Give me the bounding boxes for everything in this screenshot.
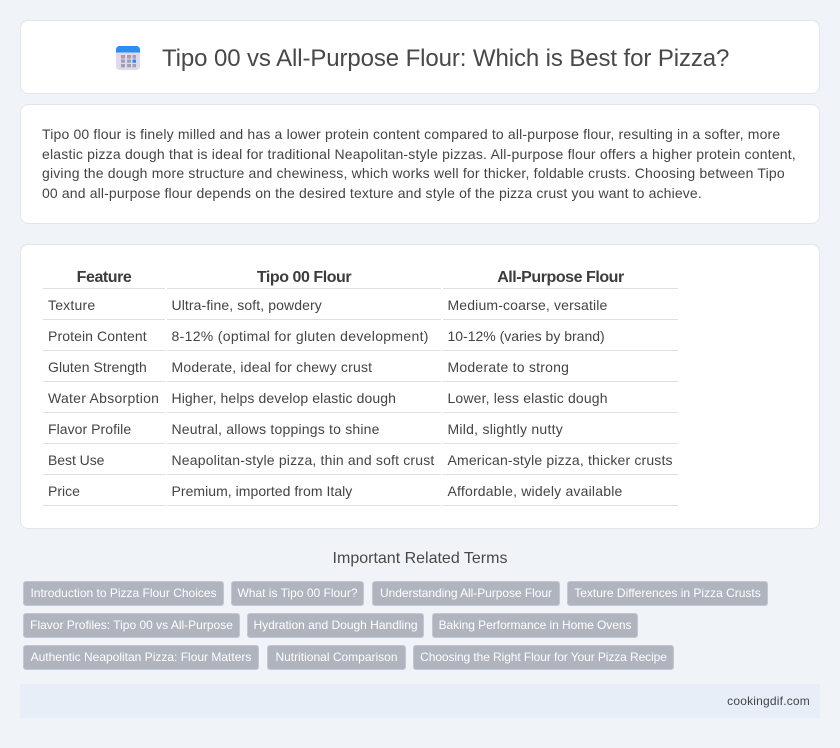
intro paragraph: giving the dough more structure and chewiness, which works well for thicker, foldable crusts. Choosing between Tipo — [42, 165, 785, 181]
table header — [77, 269, 624, 286]
table rows: Flavor Profile — [48, 421, 131, 437]
related term tags: Hydration and Dough Handling — [253, 618, 418, 632]
table rows: Protein Content — [48, 328, 147, 344]
table rows: Affordable, widely available — [448, 483, 623, 499]
related term tags: What is Tipo 00 Flour? — [237, 586, 358, 600]
table rows: Water Absorption — [48, 390, 159, 406]
table rows — [43, 288, 678, 506]
header panel — [20, 20, 820, 94]
footer source: cookingdif.com — [727, 694, 810, 708]
intro paragraph — [42, 126, 796, 201]
table rows: Lower, less elastic dough — [448, 390, 608, 406]
table rows: Neutral, allows toppings to shine — [172, 421, 380, 437]
table rows: Texture — [48, 297, 95, 313]
table header: Tipo 00 Flour — [257, 269, 351, 286]
table rows: Premium, imported from Italy — [172, 483, 352, 499]
icon: calendar — [116, 46, 140, 70]
table rows: Moderate, ideal for chewy crust — [172, 359, 372, 375]
table rows: Mild, slightly nutty — [448, 421, 563, 437]
related term tags — [23, 581, 768, 670]
related term tags: Flavor Profiles: Tipo 00 vs All-Purpose — [30, 618, 233, 632]
table rows: Moderate to strong — [448, 359, 569, 375]
table rows: 8-12% (optimal for gluten development) — [172, 328, 429, 344]
related term tags: Texture Differences in Pizza Crusts — [574, 586, 761, 600]
related term tags: Understanding All-Purpose Flour — [380, 586, 552, 600]
table rows: 10-12% (varies by brand) — [448, 328, 605, 344]
title: Tipo 00 vs All-Purpose Flour: Which is Best for Pizza? — [162, 45, 729, 72]
related term tags: Choosing the Right Flour for Your Pizza Recipe — [420, 650, 667, 664]
related term tags: Nutritional Comparison — [275, 650, 398, 664]
table rows: Gluten Strength — [48, 359, 147, 375]
intro paragraph: elastic pizza dough that is ideal for traditional Neapolitan-style pizzas. All-purpose flour offers a higher protein content, — [42, 146, 796, 162]
intro paragraph: Tipo 00 flour is finely milled and has a lower protein content compared to all-purpose flour, resulting in a softer, more — [42, 126, 780, 142]
intro paragraph: 00 and all-purpose flour depends on the desired texture and style of the pizza crust you want to achieve. — [42, 184, 702, 200]
table rows: American-style pizza, thicker crusts — [448, 452, 673, 468]
table header: All-Purpose Flour — [497, 269, 624, 286]
table rows: Price — [48, 483, 80, 499]
table rows: Higher, helps develop elastic dough — [172, 390, 396, 406]
related terms heading: Important Related Terms — [333, 550, 507, 567]
footer bar — [20, 684, 820, 718]
panel: comparison table — [20, 244, 820, 529]
table header: Feature — [77, 269, 131, 286]
table rows: Best Use — [48, 452, 104, 468]
related term tags: Introduction to Pizza Flour Choices — [30, 586, 217, 600]
related term tags: Authentic Neapolitan Pizza: Flour Matters — [31, 650, 251, 664]
related term tags: Baking Performance in Home Ovens — [439, 618, 631, 632]
table rows: Ultra-fine, soft, powdery — [172, 297, 322, 313]
table rows: Neapolitan-style pizza, thin and soft crust — [172, 452, 434, 468]
table rows: Medium-coarse, versatile — [448, 297, 608, 313]
panel: intro text — [20, 104, 820, 224]
